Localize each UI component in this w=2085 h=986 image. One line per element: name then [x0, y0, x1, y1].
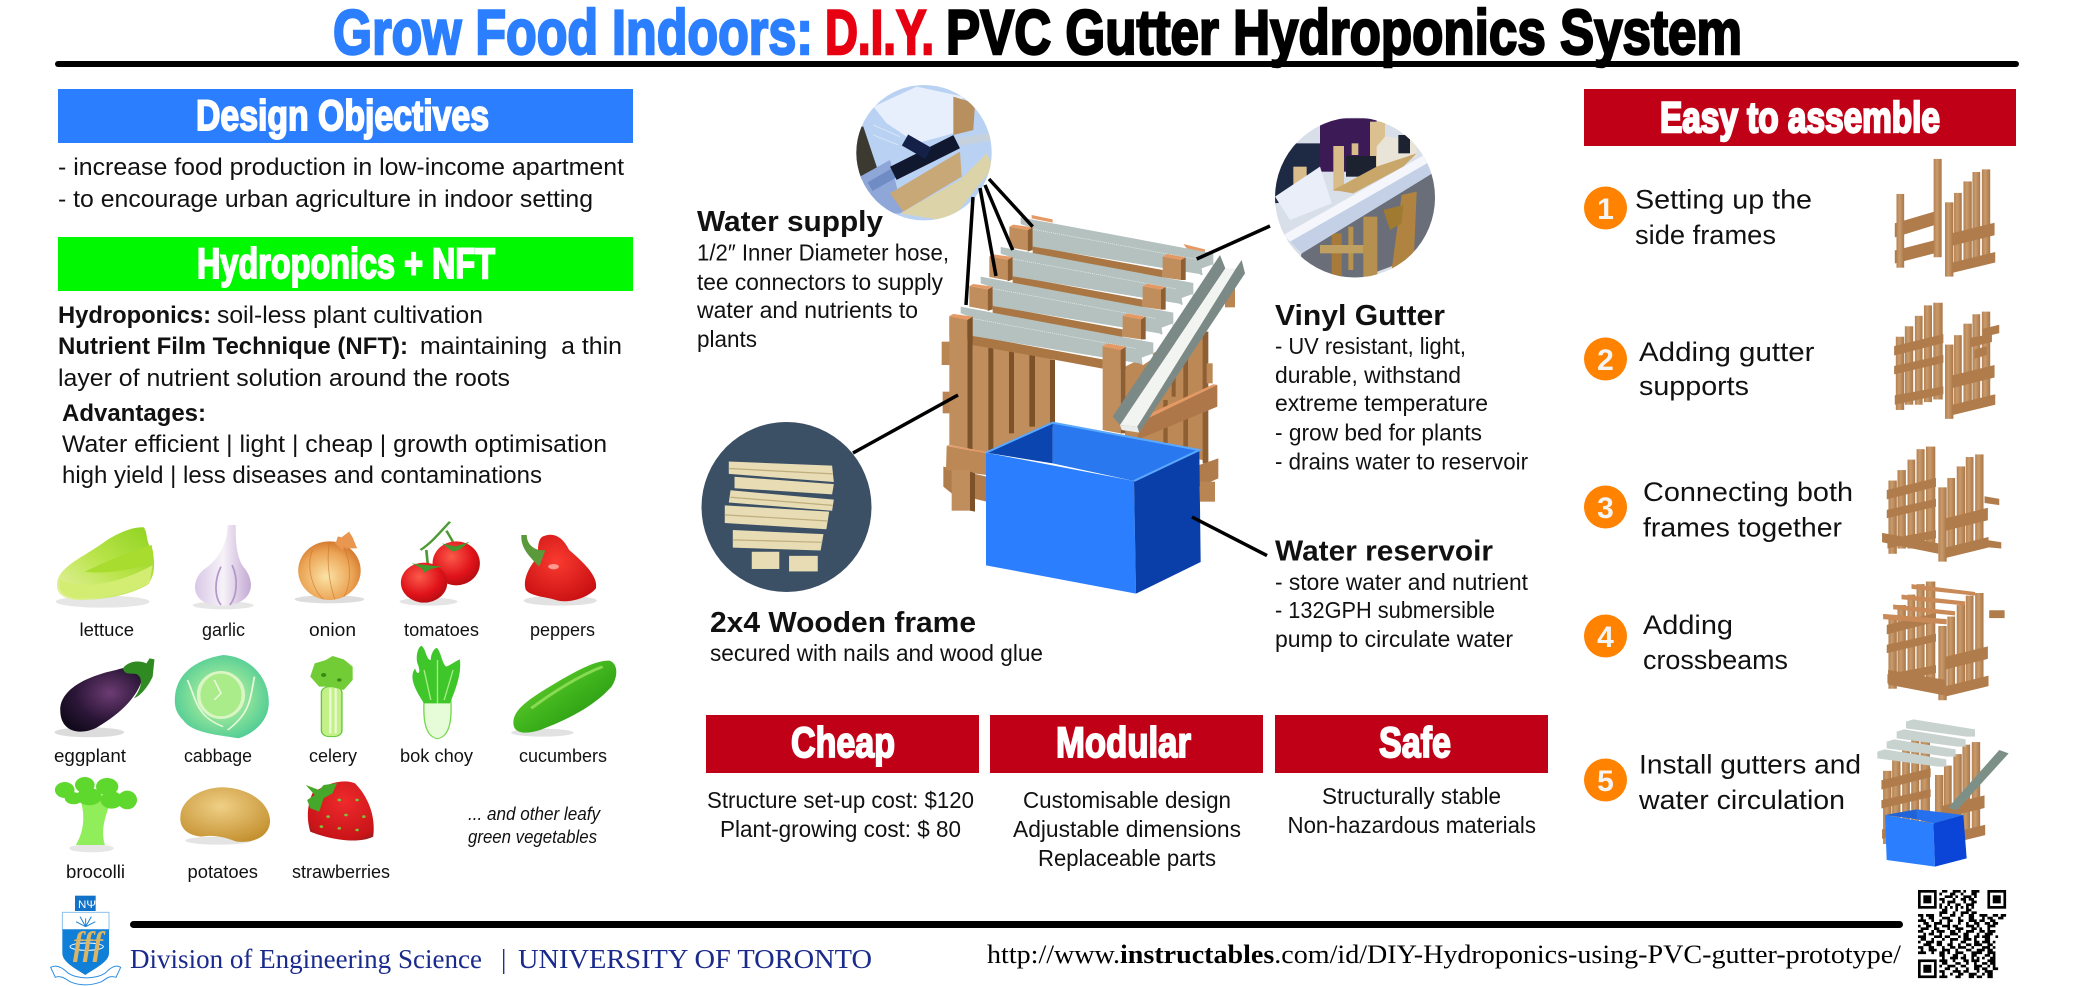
- label: vinyl gutter: [1275, 300, 1528, 474]
- label: water reservoir: [1275, 536, 1529, 652]
- panel: cheap: Structure set-up cost: $120: [707, 787, 974, 813]
- label: vinyl gutter: - UV resistant, light,: [1275, 333, 1466, 359]
- text: advantages: Water efficient | light | cheap | growth optimisation: [62, 431, 607, 458]
- text: definitions: [58, 302, 622, 392]
- icon: strawberries: [306, 781, 374, 841]
- vegetable labels: celery: [309, 746, 357, 766]
- label: water supply: [696, 206, 949, 352]
- text: definitions: layer of nutrient solution around the roots: [58, 365, 510, 392]
- note: other leafy greens: green vegetables: [468, 827, 597, 847]
- left wooden frame: [942, 336, 1103, 502]
- photo: wood pieces: [700, 420, 875, 595]
- vegetable labels: brocolli: [66, 862, 125, 882]
- vegetable labels: potatoes: [188, 862, 258, 882]
- vegetable labels: tomatoes: [404, 620, 479, 640]
- vegetable labels: peppers: [530, 620, 595, 640]
- vegetable labels: strawberries: [292, 862, 390, 882]
- vegetable labels: garlic: [202, 620, 245, 640]
- vegetable labels: onion: [309, 620, 356, 640]
- thumbnail: gutter supports: [1894, 303, 1999, 419]
- step 1: side frames: [1635, 220, 1776, 250]
- icon: garlic: [193, 525, 254, 609]
- vegetable labels: cucumbers: [519, 746, 607, 766]
- note: other leafy greens: [468, 804, 601, 847]
- text: objectives: [58, 154, 624, 213]
- text: objectives: - to encourage urban agriculture in indoor setting: [58, 186, 593, 213]
- label: water supply: 1/2″ Inner Diameter hose,: [697, 240, 949, 266]
- panel: cheap: Cheap: [791, 719, 895, 767]
- footer: university: Division of Engineering Science: [130, 944, 482, 974]
- title: D.I.Y.: [825, 0, 934, 68]
- panel: modular: Modular: [1056, 719, 1191, 767]
- footer rule: [130, 921, 1903, 928]
- thumbnail: side frames: [1895, 159, 1995, 277]
- label: water supply: Water supply: [697, 206, 883, 238]
- label: water reservoir: - 132GPH submersible: [1275, 597, 1495, 623]
- heading: design objectives: Design Objectives: [196, 92, 489, 140]
- step 1: Setting up the: [1635, 184, 1812, 214]
- panel: modular: Replaceable parts: [1038, 845, 1216, 871]
- label: water reservoir: - store water and nutrient: [1275, 569, 1529, 595]
- panel: hydroponics and NFT: [58, 237, 633, 489]
- icon: brocolli: [55, 777, 137, 852]
- text: definitions: Nutrient Film Technique (NFT):: [58, 333, 408, 360]
- heading: hydroponics + NFT: Hydroponics + NFT: [197, 240, 495, 288]
- text: objectives: - increase food production in low-income apartment: [58, 154, 624, 181]
- vegetable labels: cabbage: [184, 746, 252, 766]
- footer: url: http://www. instructables .com/id/DIY-Hydroponics-using-PVC-gutter-prototype/: [987, 940, 1902, 969]
- label: water reservoir: Water reservoir: [1275, 536, 1493, 568]
- panel: design objectives: [58, 89, 633, 213]
- title: PVC Gutter Hydroponics System: [946, 0, 1742, 68]
- label: vinyl gutter: - drains water to reservoir: [1275, 448, 1528, 474]
- icon: peppers: [521, 535, 597, 606]
- icon: celery: [310, 656, 353, 737]
- label: water supply: tee connectors to supply: [697, 269, 943, 295]
- icon: bok choy: [412, 646, 460, 739]
- panel: modular: Customisable design: [1023, 787, 1231, 813]
- heading: design objectives: [58, 89, 633, 143]
- label: water supply: plants: [697, 326, 757, 352]
- icon: potatoes: [180, 787, 270, 845]
- panel: safe: Non-hazardous materials: [1288, 812, 1536, 838]
- water reservoir box: [986, 423, 1201, 594]
- panel: vegetables: [54, 522, 616, 882]
- label: water reservoir: pump to circulate water: [1275, 626, 1513, 652]
- label: vinyl gutter: Vinyl Gutter: [1275, 300, 1445, 332]
- panel: safe: Safe: [1379, 719, 1451, 767]
- logo: engineering science crest: [51, 896, 121, 985]
- title: [333, 0, 1742, 68]
- heading: easy to assemble: Easy to assemble: [1660, 94, 1940, 142]
- photo: vinyl gutter: [1273, 117, 1437, 280]
- step 2: Adding gutter: [1639, 337, 1814, 367]
- icon: cucumbers: [511, 661, 616, 737]
- vegetable labels: lettuce: [80, 620, 134, 640]
- step 5: [1584, 750, 1861, 815]
- heading: hydroponics + NFT: [58, 237, 633, 291]
- step 2: [1584, 337, 1814, 401]
- logo: engineering science crest: NΨ: [78, 899, 96, 911]
- panel: easy to assemble: [1584, 89, 2016, 867]
- text: advantages: [62, 400, 607, 489]
- icon: lettuce: [56, 527, 154, 608]
- photo: water supply connector: [855, 83, 993, 222]
- front posts: [946, 314, 1125, 512]
- step 5: Install gutters and: [1639, 750, 1861, 780]
- thumbnail: connecting frames: [1882, 447, 2001, 562]
- panel: cheap: [706, 715, 979, 842]
- vegetable labels: eggplant: [54, 746, 126, 766]
- step 5: 5: [1597, 765, 1614, 798]
- label: vinyl gutter: durable, withstand: [1275, 362, 1461, 388]
- label: water supply: water and nutrients to: [696, 297, 918, 323]
- footer: university: |: [501, 944, 506, 974]
- icon: cabbage: [175, 655, 269, 738]
- note: other leafy greens: ... and other leafy: [468, 804, 601, 824]
- step 3: Connecting both: [1643, 477, 1853, 507]
- step 4: 4: [1597, 621, 1614, 654]
- panel: safe: Structurally stable: [1322, 783, 1501, 809]
- logo: engineering science crest: fff: [73, 926, 106, 963]
- icon: eggplant: [54, 658, 154, 737]
- footer: university: UNIVERSITY OF TORONTO: [518, 944, 872, 974]
- icon: onion: [295, 532, 364, 603]
- panel: safe: [1275, 715, 1548, 838]
- drain gutter: [1113, 255, 1245, 433]
- text: advantages: Advantages:: [62, 400, 206, 427]
- text: definitions: maintaining a thin: [420, 333, 622, 360]
- thumbnail: complete system: [1881, 737, 1985, 849]
- heading: easy to assemble: [1584, 89, 2016, 146]
- diagram: hydroponics system: [696, 83, 1529, 666]
- leader lines: [853, 179, 1270, 556]
- step 4: Adding: [1643, 610, 1733, 640]
- label: wooden frame: 2x4 Wooden frame: [710, 607, 976, 639]
- label: wooden frame: [710, 607, 1043, 666]
- label: vinyl gutter: extreme temperature: [1275, 390, 1488, 416]
- step 2: 2: [1597, 344, 1614, 377]
- vegetable labels: [54, 620, 607, 882]
- thumbnail: crossbeams: [1883, 581, 2005, 700]
- gutters: [949, 217, 1213, 369]
- step 3: [1584, 477, 1853, 542]
- QR code: [1918, 891, 2006, 977]
- text: definitions: Hydroponics:: [58, 302, 211, 329]
- title: Grow Food Indoors:: [333, 0, 813, 68]
- panel: cheap: Plant-growing cost: $ 80: [720, 816, 961, 842]
- text: advantages: high yield | less diseases and contaminations: [62, 462, 542, 489]
- thumbnail: gutters and box: [1877, 719, 2009, 867]
- text: definitions: soil-less plant cultivation: [217, 302, 483, 329]
- step 1: 1: [1597, 193, 1614, 226]
- step 3: frames together: [1643, 512, 1842, 542]
- right wooden frame: [1032, 215, 1235, 502]
- label: wooden frame: secured with nails and wood glue: [710, 640, 1043, 666]
- icon: tomatoes: [400, 522, 480, 606]
- panel: modular: Adjustable dimensions: [1013, 816, 1241, 842]
- step 2: supports: [1639, 371, 1749, 401]
- footer: university: [130, 944, 872, 974]
- step 4: [1584, 610, 1788, 675]
- step 5: water circulation: [1638, 785, 1845, 815]
- vegetable labels: bok choy: [400, 746, 473, 766]
- step 3: 3: [1597, 492, 1614, 525]
- label: vinyl gutter: - grow bed for plants: [1275, 420, 1482, 446]
- panel: modular: [990, 715, 1263, 871]
- step 1: [1584, 184, 1812, 250]
- step 4: crossbeams: [1643, 645, 1788, 675]
